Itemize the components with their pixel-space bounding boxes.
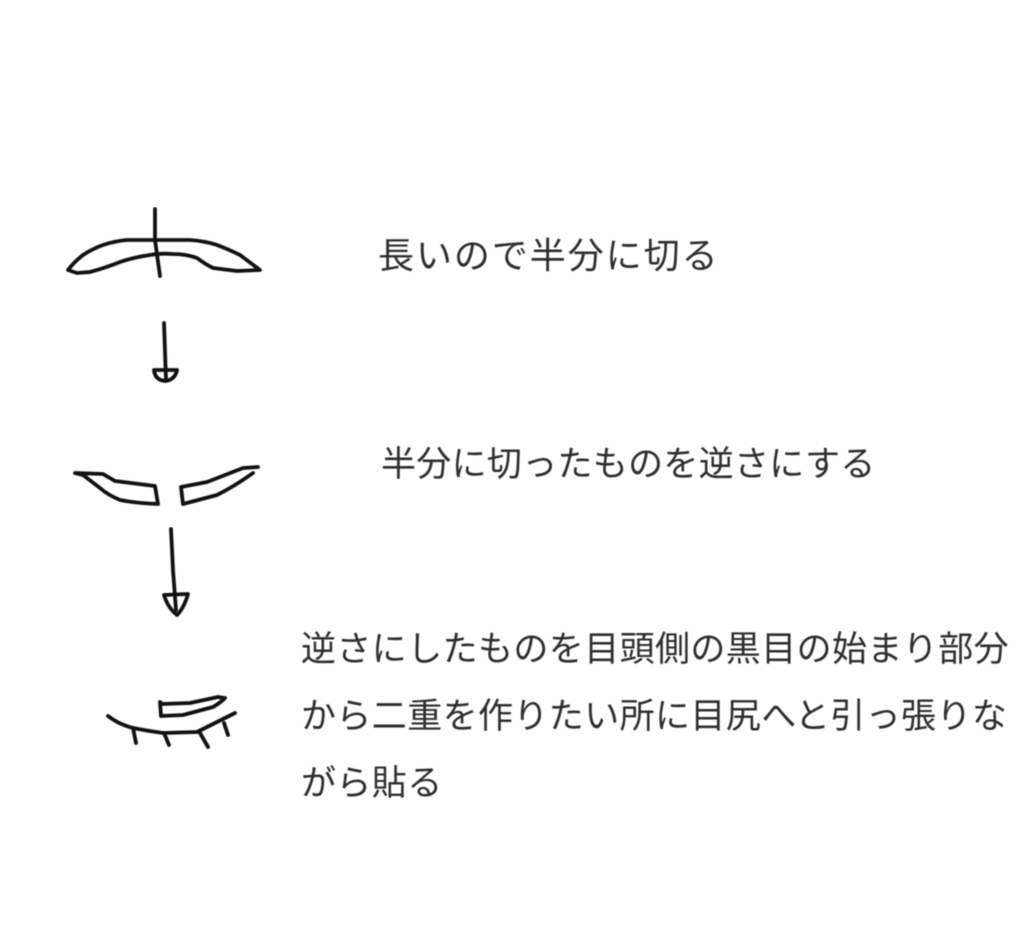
icon: right half of tape xyxy=(181,467,258,504)
icon: long tape with cut line xyxy=(68,209,260,276)
text: step 3 xyxy=(301,630,1009,803)
text: step 3: 逆さにしたものを目頭側の黒目の始まり部分 xyxy=(301,630,1009,669)
text: step 3: がら貼る xyxy=(301,764,443,803)
arrow: second step down xyxy=(164,529,188,615)
text: step 1: 長いので半分に切る xyxy=(378,235,720,276)
text: step 2: 半分に切ったものを逆さにする xyxy=(381,445,876,484)
icon: closed eye with tape xyxy=(108,697,235,747)
text: step 3: から二重を作りたい所に目尻へと引っ張りな xyxy=(301,697,1007,736)
icon: left half of tape xyxy=(75,473,158,504)
arrow: first step down xyxy=(154,323,177,381)
